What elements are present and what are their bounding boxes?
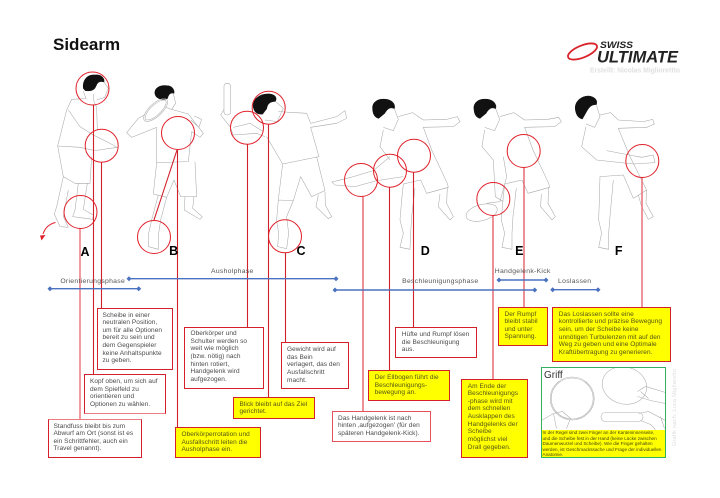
yellow text box: Rumpf: bleibt stabil <box>504 318 538 325</box>
yellow text box: Am Ende: Handgelenks der <box>468 421 518 428</box>
text box: Gewicht: macht. <box>287 377 307 384</box>
logo: Swiss Ultimate: ULTIMATE <box>597 48 679 66</box>
figure D <box>332 99 460 249</box>
text box: Scheibe: bereit zu sein und <box>102 334 155 341</box>
step letter A: A <box>80 245 90 259</box>
yellow text box: Am Ende: möglichst viel <box>468 436 508 443</box>
text box: Kopf: Kopf oben, um sich auf <box>90 378 158 385</box>
yellow text box: Ellbogen <box>368 370 450 401</box>
yellow text box: Oberkörperrotation: Ausfallschritt leiten die <box>182 439 247 446</box>
text box: Gewicht: das Bein <box>287 354 313 361</box>
yellow text box: Am Ende: dem schnellen <box>468 405 510 412</box>
yellow text box: Oberkörperrotation: Ausholphase ein. <box>182 446 232 453</box>
text box: Standfuss: Travel genannt). <box>54 445 101 452</box>
text box: Scheibe <box>96 308 172 370</box>
text box: Gewicht: verlagert, das den <box>287 361 340 368</box>
text box: Handgelenk: späteren Handgelenk-Kick). <box>338 430 420 437</box>
text box: Oberkörper und Schultern: Oberkörper und <box>190 330 237 337</box>
text box: Kopf: dem Spielfeld zu <box>90 386 139 393</box>
grip explanation strip: In der Regel sind zwei Finger an der Kanteninnenseite, <box>542 430 654 435</box>
yellow text box: Am Ende: -phase wird mit <box>468 398 513 405</box>
yellow text box: Am Ende: Beschleunigungs <box>468 390 518 397</box>
figure B <box>127 86 203 249</box>
phase label: Loslassen: Loslassen <box>558 278 591 285</box>
yellow text box: Blick: Blick bleibt auf das Ziel <box>240 400 307 408</box>
phase arrows <box>48 276 600 292</box>
text box: Scheibe: neutralen Position, <box>102 319 157 326</box>
logo: Swiss Ultimate: SWISS <box>600 40 634 51</box>
text box: Oberkörper und Schultern: Handgelenk wird <box>190 368 240 375</box>
text box: Oberkörper und Schultern: weit wie möglich <box>190 345 239 352</box>
highlight circles <box>64 72 659 254</box>
yellow text box: Ellbogen: Beschleunigungs- <box>375 382 427 389</box>
text box: Scheibe: Scheibe in einer <box>102 312 150 318</box>
figure E <box>464 99 561 249</box>
text box: Standfuss: ein Schrittfehler, auch ein <box>54 438 128 445</box>
step letter B: B <box>169 244 178 258</box>
text box: Gewicht: Gewicht wird auf <box>287 346 336 353</box>
yellow text box: Am Ende: Am Ende der <box>468 382 506 390</box>
yellow text box: Loslassen: Kraftübertragung zu generieren. <box>559 349 652 356</box>
yellow text box: Oberkörperrotation: Oberkörperrotation und <box>182 431 250 438</box>
logo: Swiss Ultimate: Erstellt: Nicolas Migliorettto <box>590 68 680 74</box>
text box: Oberkörper und Schultern: Schulter werden so <box>190 338 247 345</box>
yellow text box: Am Ende <box>461 379 528 458</box>
text box: Gewicht <box>281 342 348 389</box>
text box: Standfuss <box>48 418 142 458</box>
credit: vertical text: Grafik nach: Luca Migliaretto <box>672 369 678 446</box>
text box: Handgelenk <box>332 410 431 442</box>
step letter C: C <box>296 244 306 258</box>
logo: Swiss Ultimate <box>566 40 680 74</box>
figure A <box>54 75 117 227</box>
text box: Hüfte und Rumpf: Hüfte und Rumpf lösen <box>402 331 469 338</box>
yellow text box: Am Ende: Ausklappen des <box>468 413 515 420</box>
phase label: Handgelenk-Kick: Handgelenk-Kick <box>495 268 551 275</box>
yellow text box: Ellbogen: bewegung an. <box>375 389 416 396</box>
text box: Kopf: Optionen zu wählen. <box>90 401 150 408</box>
grip explanation strip: Daumenwurzel und Scheibe). Wie die Finger gehalten <box>542 441 653 446</box>
yellow text box: Loslassen: unnötigen Turbulenzen mit auf den <box>559 334 661 341</box>
text box: Oberkörper und Schultern: hinten rotiert, <box>190 361 229 368</box>
yellow text box: Rumpf: Der Rumpf <box>504 310 536 318</box>
figure C <box>221 83 347 249</box>
yellow text box: Loslassen: kontrollierte und präzise Bewegung <box>559 318 662 325</box>
yellow text box: Loslassen <box>552 307 671 362</box>
grip explanation strip <box>542 430 664 457</box>
grip explanation strip: Anatomie. <box>542 452 563 457</box>
text box: Oberkörper und Schultern: (bzw. nötig) nach <box>190 353 240 360</box>
yellow text box: Oberkörperrotation <box>174 427 260 458</box>
yellow text box: Loslassen: sein, um der Scheibe keine <box>559 326 639 333</box>
text box: Scheibe: dem Gegenspieler <box>102 342 156 349</box>
yellow text box: Ellbogen: Der Ellbogen führt die <box>375 374 439 381</box>
title: Sidearm <box>53 35 120 54</box>
red guide lines <box>80 105 642 427</box>
step letter F: F <box>615 244 623 258</box>
panel heading: Griff: Griff <box>544 370 563 381</box>
phase label: Ausholphase: Ausholphase <box>211 268 254 275</box>
text box: Handgelenk: hinten ‚aufgezogen' (für den <box>338 422 420 429</box>
yellow text box: Rumpf: und unter <box>504 326 532 333</box>
yellow text box: Am Ende: Scheibe <box>468 428 492 435</box>
text box: Scheibe: zu geben. <box>102 357 132 364</box>
step letter E: E <box>515 244 523 258</box>
text box: Hüfte und Rumpf: aus. <box>402 346 414 353</box>
yellow text box: Am Ende: Drall gegeben. <box>468 444 511 451</box>
yellow text box: Blick <box>233 396 314 419</box>
yellow text box: Rumpf: Spannung. <box>504 333 536 340</box>
text box: Standfuss: Standfuss bleibt bis zum <box>54 422 125 430</box>
text box: Kopf <box>84 374 166 414</box>
yellow text box: Loslassen: Das Loslassen sollte eine <box>559 311 634 318</box>
grip illustrations <box>542 368 665 430</box>
text box: Standfuss: Abwurf am Ort (sonst ist es <box>54 430 133 437</box>
text box: Hüfte und Rumpf <box>395 327 477 358</box>
yellow text box: Blick: gerichtet. <box>240 408 267 415</box>
text box: Scheibe: um für alle Optionen <box>102 327 162 334</box>
text box: Handgelenk: Das Handgelenk ist nach <box>338 414 411 422</box>
text box: Kopf: orientieren und <box>90 393 134 400</box>
grip explanation strip: und die Scheibe fest in der Hand (keine Lücke zwischen <box>542 436 657 441</box>
text box: Gewicht: Ausfallschritt <box>287 369 325 376</box>
yellow text box: Rumpf <box>498 307 548 346</box>
panel: Griff <box>540 366 666 458</box>
text box: Oberkörper und Schultern <box>184 326 264 389</box>
figure F <box>575 96 655 249</box>
text box: Hüfte und Rumpf: die Beschleunigung <box>402 339 459 346</box>
yellow text box: Loslassen: Weg zu geben und eine Optimale <box>559 341 657 348</box>
text box: Scheibe: keine Anhaltspunkte <box>102 350 162 357</box>
grip explanation strip: werden, ist Geschmackssache und Frage der individuellen <box>542 447 662 452</box>
phase label: Beschleunigungsphase: Beschleunigungsphase <box>402 278 478 285</box>
arrow: pivot foot movement <box>40 222 56 240</box>
text box: Oberkörper und Schultern: aufgezogen. <box>190 376 227 383</box>
phase label: Orientierungsphase: Orientierungsphase <box>60 278 125 285</box>
step letter D: D <box>421 244 430 258</box>
